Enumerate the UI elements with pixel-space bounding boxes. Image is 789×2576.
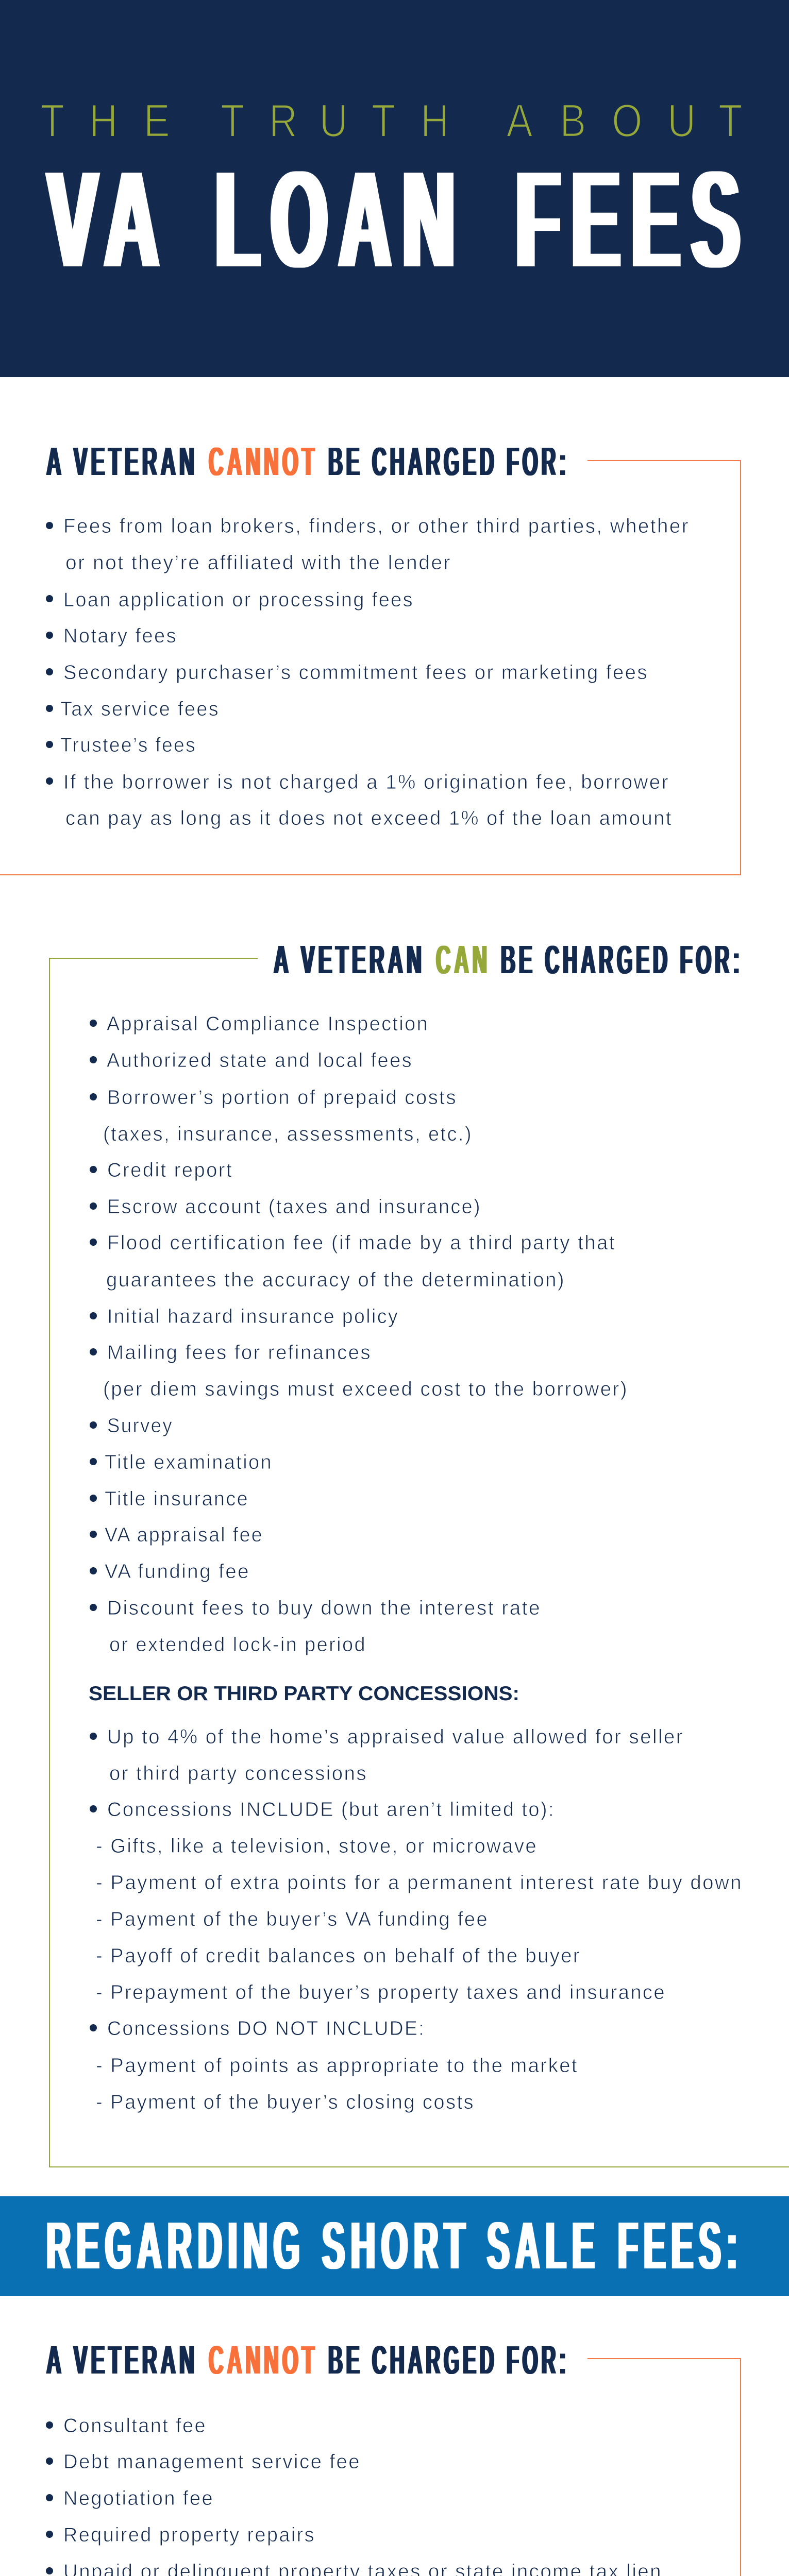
panel: veteran cannot be charged for — [0, 438, 741, 875]
heading: cannot: A VETERAN — [46, 2337, 198, 2383]
title: va loan fees — [47, 141, 751, 298]
list: fees that cannot be charged: Loan application or processing fees — [63, 589, 414, 611]
list: fees that can be charged: guarantees the accuracy of the determination) — [106, 1269, 565, 1291]
banner: regarding short sale fees — [0, 2196, 789, 2296]
heading: can: CAN — [436, 937, 491, 982]
list: fees that can be charged: Survey — [107, 1415, 173, 1437]
list: fees that can be charged — [90, 1013, 628, 1656]
list: short sale fees that cannot be charged: Required property repairs — [63, 2524, 315, 2546]
list: fees that can be charged: (taxes, insurance, assessments, etc.) — [103, 1123, 473, 1145]
title: the truth about: THE TRUTH ABOUT — [40, 94, 743, 146]
list: fees that can be charged: Flood certification fee (if made by a third party that — [107, 1232, 616, 1254]
list: concessions: - Payment of points as appropriate to the market — [96, 2055, 578, 2077]
list: concessions — [90, 1726, 743, 2113]
heading: cannot — [46, 2337, 569, 2383]
subheading: seller or third party concessions: SELLER OR THIRD PARTY CONCESSIONS: — [89, 1683, 519, 1705]
list: fees that cannot be charged: Notary fees — [63, 625, 177, 647]
list: fees that cannot be charged: If the borrower is not charged a 1% origination fee, borrower — [63, 771, 669, 793]
list: fees that can be charged: Discount fees to buy down the interest rate — [107, 1597, 541, 1619]
panel frame: orange — [0, 2359, 741, 2576]
list: fees that can be charged: Escrow account (taxes and insurance) — [107, 1196, 481, 1218]
heading: cannot: A VETERAN — [46, 438, 198, 484]
list: concessions: - Payment of extra points for a permanent interest rate buy down — [96, 1872, 743, 1894]
panel frame: orange — [0, 461, 741, 875]
list: fees that can be charged: Authorized state and local fees — [107, 1049, 413, 1072]
list: fees that cannot be charged: Secondary purchaser’s commitment fees or marketing fees — [63, 662, 648, 684]
list: fees that can be charged: Credit report — [107, 1159, 233, 1181]
list: short sale fees that cannot be charged — [46, 2415, 662, 2576]
list: fees that can be charged: or extended lock-in period — [109, 1634, 366, 1656]
list: short sale fees that cannot be charged: Negotiation fee — [63, 2487, 214, 2510]
list: fees that cannot be charged: Fees from loan brokers, finders, or other third parties, whether — [63, 515, 690, 537]
heading: can — [274, 937, 743, 982]
list: short sale fees that cannot be charged: Consultant fee — [63, 2415, 207, 2437]
banner heading: SHORT — [322, 2208, 471, 2283]
list: fees that can be charged: Mailing fees for refinances — [107, 1342, 372, 1364]
heading: cannot: CANNOT — [209, 438, 318, 484]
list: concessions: or third party concessions — [109, 1762, 367, 1785]
panel: veteran can be charged for — [49, 937, 789, 2167]
list: fees that can be charged: Title examination — [105, 1451, 273, 1473]
list: fees that can be charged: Title insurance — [105, 1488, 249, 1510]
list: fees that can be charged: Initial hazard insurance policy — [107, 1306, 399, 1328]
list: fees that cannot be charged: Tax service fees — [60, 698, 220, 720]
title: va loan fees: VA — [47, 141, 171, 298]
list: concessions: Concessions DO NOT INCLUDE: — [107, 2018, 425, 2040]
banner heading: REGARDING — [46, 2208, 306, 2283]
heading: cannot: CANNOT — [209, 2337, 318, 2383]
heading: can: A VETERAN — [274, 937, 425, 982]
panel: hero header — [0, 0, 789, 377]
list: concessions: Up to 4% of the home’s appraised value allowed for seller — [107, 1726, 684, 1748]
panel: short sale cannot be charged for — [0, 2337, 741, 2576]
title: va loan fees: LOAN — [215, 141, 466, 298]
banner heading: SALE — [487, 2208, 600, 2283]
list: fees that cannot be charged — [46, 515, 690, 829]
list: fees that can be charged: VA funding fee — [105, 1561, 250, 1583]
list: fees that cannot be charged: or not they’re affiliated with the lender — [65, 552, 451, 574]
list: concessions: - Payment of the buyer’s closing costs — [96, 2091, 475, 2113]
heading: cannot — [46, 438, 569, 484]
list: concessions: - Payment of the buyer’s VA funding fee — [96, 1908, 489, 1930]
panel frame: green — [49, 958, 789, 2167]
list: fees that can be charged: Appraisal Compliance Inspection — [107, 1013, 429, 1035]
list: fees that can be charged: VA appraisal fee — [105, 1524, 263, 1546]
list: concessions: Concessions INCLUDE (but aren’t limited to): — [107, 1799, 555, 1821]
list: fees that can be charged: (per diem savings must exceed cost to the borrower) — [103, 1378, 628, 1400]
list: fees that cannot be charged: can pay as long as it does not exceed 1% of the loan amount — [65, 807, 673, 829]
list: concessions: - Gifts, like a television, stove, or microwave — [96, 1835, 538, 1857]
list: fees that can be charged: Borrower’s portion of prepaid costs — [107, 1087, 457, 1109]
list: concessions: - Prepayment of the buyer’s property taxes and insurance — [96, 1981, 666, 2004]
list: short sale fees that cannot be charged: Debt management service fee — [63, 2451, 361, 2473]
list: concessions: - Payoff of credit balances on behalf of the buyer — [96, 1945, 581, 1967]
list: fees that cannot be charged: Trustee’s fees — [60, 734, 196, 756]
